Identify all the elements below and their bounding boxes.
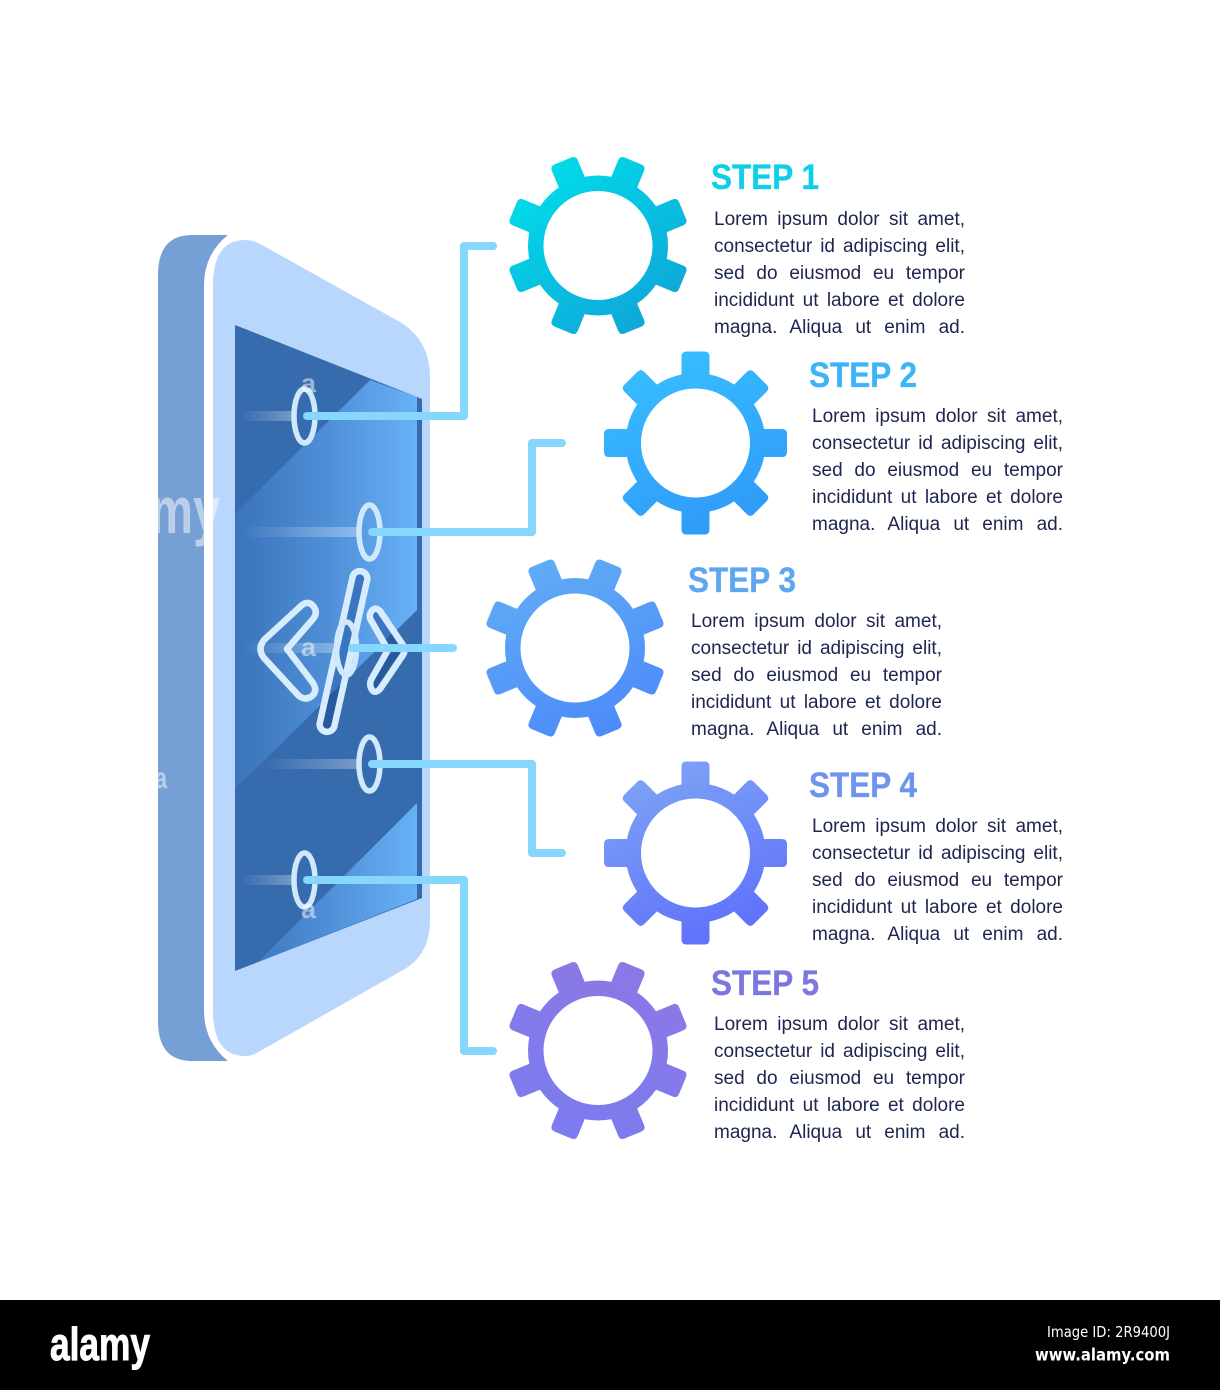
text: step 2 description: incididunt ut labore et dolore: [812, 486, 1063, 508]
step 1: [509, 157, 965, 338]
heading: step 2: STEP 2: [809, 356, 917, 395]
footer bar: [0, 1300, 1220, 1390]
watermark fragments: a: [301, 368, 317, 398]
text: step 1 description: magna. Aliqua ut enim ad.: [714, 316, 965, 338]
icon: gear 5: [510, 962, 686, 1139]
text: step 5 description: consectetur id adipiscing elit,: [714, 1040, 965, 1062]
heading: step 4: STEP 4: [809, 766, 917, 805]
text: step 4 description: magna. Aliqua ut enim ad.: [812, 924, 1063, 944]
text: step 2 description: consectetur id adipiscing elit,: [812, 432, 1063, 454]
watermark fragments: a: [301, 632, 317, 662]
step 4: [604, 762, 1063, 944]
heading: step 3: STEP 3: [688, 561, 796, 600]
text: step 3 description: consectetur id adipiscing elit,: [691, 638, 942, 658]
text: step 2 description: [812, 406, 1063, 534]
watermark fragments: a: [301, 894, 317, 924]
watermark fragments: [150, 368, 317, 924]
step 3: [486, 560, 942, 740]
text: step 1 description: consectetur id adipiscing elit,: [714, 236, 965, 256]
text: step 4 description: consectetur id adipiscing elit,: [812, 842, 1063, 864]
step 2: [604, 352, 1063, 534]
text: step 1 description: sed do eiusmod eu tempor: [714, 262, 965, 284]
text: step 5 description: [714, 1014, 965, 1142]
watermark fragments: a: [155, 762, 167, 795]
step 5: [510, 962, 965, 1142]
image id: Image ID: 2R9400J: [1047, 1323, 1170, 1341]
text: step 3 description: [691, 610, 942, 740]
heading: step 1: STEP 1: [711, 158, 819, 197]
watermark fragments: my: [150, 473, 220, 547]
text: step 1 description: incididunt ut labore et dolore: [714, 290, 965, 310]
text: step 2 description: sed do eiusmod eu tempor: [812, 460, 1063, 480]
icon: gear 4: [604, 762, 787, 944]
icon: gear 3: [486, 560, 664, 736]
text: step 4 description: sed do eiusmod eu tempor: [812, 870, 1063, 890]
text: step 5 description: magna. Aliqua ut enim ad.: [714, 1122, 965, 1142]
icon: code symbol: [260, 571, 404, 732]
text: step 3 description: incididunt ut labore et dolore: [691, 692, 942, 712]
heading: step 5: STEP 5: [711, 964, 819, 1003]
phone front face: [213, 240, 430, 1056]
website: www.alamy.com: [1035, 1346, 1170, 1366]
text: step 2 description: magna. Aliqua ut enim ad.: [812, 514, 1063, 534]
text: step 4 description: incididunt ut labore et dolore: [812, 896, 1063, 918]
text: step 5 description: sed do eiusmod eu tempor: [714, 1068, 965, 1088]
text: step 1 description: Lorem ipsum dolor sit amet,: [714, 208, 965, 230]
text: step 2 description: Lorem ipsum dolor sit amet,: [812, 406, 1063, 426]
phone screen: [235, 325, 422, 971]
footer logo: alamy: [50, 1318, 150, 1370]
text: step 5 description: Lorem ipsum dolor sit amet,: [714, 1014, 965, 1034]
connector lines: [307, 246, 562, 1051]
text: step 3 description: magna. Aliqua ut enim ad.: [691, 718, 942, 740]
text: step 3 description: sed do eiusmod eu tempor: [691, 664, 942, 686]
icon: gear 1: [509, 157, 687, 334]
faded signal lines: [240, 411, 358, 885]
connector nodes: [294, 389, 380, 907]
phone side edge: [158, 235, 228, 1061]
text: step 4 description: Lorem ipsum dolor sit amet,: [812, 816, 1063, 836]
text: step 5 description: incididunt ut labore et dolore: [714, 1094, 965, 1116]
text: step 3 description: Lorem ipsum dolor sit amet,: [691, 610, 942, 632]
icon: gear 2: [604, 352, 787, 534]
text: step 4 description: [812, 816, 1063, 944]
text: step 1 description: [714, 208, 965, 338]
